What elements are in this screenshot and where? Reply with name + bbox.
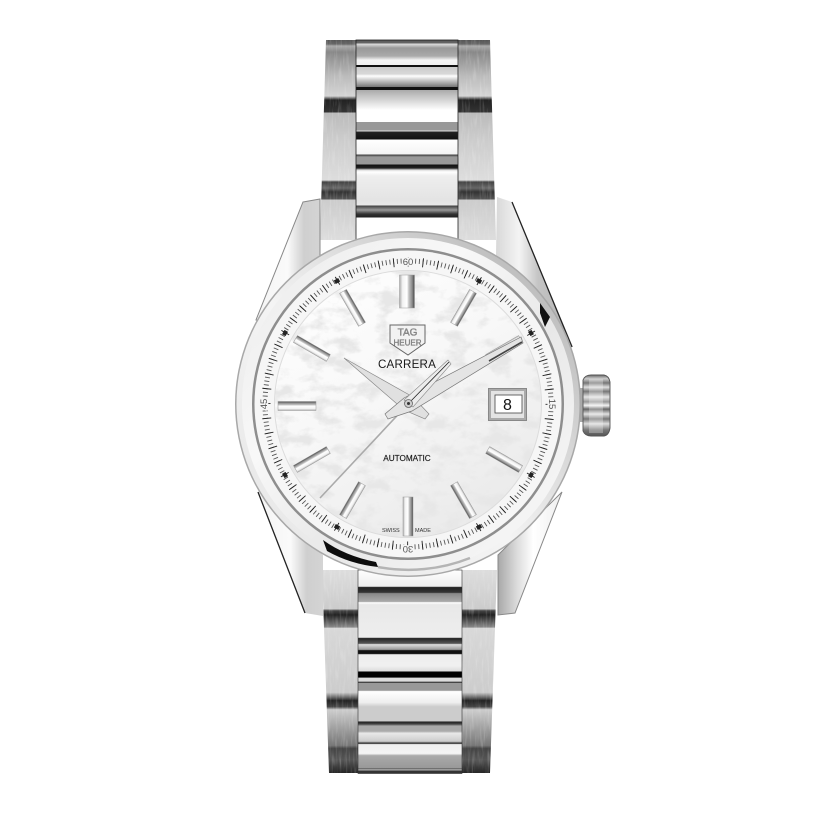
mother of pearl base: [275, 271, 541, 537]
crown body: [583, 375, 610, 436]
marker 6: [403, 497, 413, 536]
bezel outer band: [236, 232, 580, 576]
crown end highlight: [589, 379, 603, 433]
upper bracelet centre links: [356, 40, 458, 240]
seconds hand: [320, 404, 408, 498]
marker 4: [486, 447, 523, 472]
lug: lower right: [498, 492, 562, 615]
numeral 45: 45: [259, 399, 270, 409]
centre pin: [404, 400, 412, 408]
lug: upper left: [256, 199, 320, 322]
marker 11: [340, 289, 365, 326]
minute track: [265, 261, 551, 547]
crown: [576, 375, 610, 436]
date number: 8: [503, 397, 512, 414]
marker 10: [293, 336, 330, 361]
logo text HEUER: HEUER: [393, 338, 422, 348]
automatic label: AUTOMATIC: [383, 454, 431, 463]
marker 1: [451, 289, 476, 326]
brand name: CARRERA: [378, 358, 436, 371]
minute hand shadow edge: [489, 342, 522, 361]
shield outline: [390, 325, 425, 355]
hour markers: [278, 275, 523, 536]
marker 5: [451, 482, 476, 519]
marker 8: [293, 447, 330, 472]
track numerals: [259, 257, 557, 554]
seconds hand counterweight: [404, 360, 451, 407]
lug: upper right: [496, 197, 573, 347]
chapter ring: [254, 250, 562, 558]
date frame highlight: [491, 391, 524, 418]
hour hand: [344, 358, 429, 419]
brushed metal texture: [320, 40, 500, 774]
bezel inner ring: [252, 248, 564, 560]
marker 7: [340, 482, 365, 519]
marker 9: [278, 402, 316, 410]
made: MADE: [415, 528, 431, 534]
dial edge: [274, 270, 542, 538]
numeral 60: 60: [403, 257, 413, 268]
hands: [320, 337, 523, 498]
bezel: [235, 231, 581, 577]
centre pin core: [407, 402, 410, 405]
swiss: SWISS: [382, 528, 400, 534]
lug: upper right dark edge: [512, 202, 572, 347]
minor ticks: [265, 261, 551, 547]
lower bracelet: [322, 570, 497, 774]
dial: [274, 270, 542, 538]
date window: [488, 388, 526, 420]
bezel lower shadow arc: [378, 558, 470, 570]
upper bracelet side links: [320, 40, 496, 240]
lower bracelet centre links: [358, 570, 462, 774]
mother of pearl mottling: [275, 271, 541, 537]
logo: TAG Heuer shield: [390, 325, 425, 355]
major ticks: [266, 262, 550, 546]
marker 2: [486, 336, 523, 361]
bezel dark reflection lower left: [323, 540, 378, 567]
numeral 15: 15: [546, 399, 557, 409]
date aperture: [495, 395, 522, 413]
numeral 30: 30: [403, 543, 413, 554]
date frame: [488, 388, 526, 420]
lug: lower left: [258, 492, 323, 616]
lug: lower left dark edge: [258, 492, 305, 613]
minute hand: [385, 337, 523, 419]
swiss made label: [382, 528, 431, 534]
lower bracelet side links: [322, 570, 497, 773]
marker 12: [400, 275, 414, 308]
logo text TAG: TAG: [398, 328, 418, 338]
watch illustration: [235, 40, 610, 774]
five-minute squares: [282, 278, 534, 530]
bezel outer edge: [235, 231, 581, 577]
seconds hand core: [408, 362, 449, 404]
upper bracelet: [320, 40, 496, 240]
crown stem: [576, 388, 586, 422]
bezel polished face: [242, 238, 574, 570]
case lugs: [256, 197, 573, 616]
bezel dark reflection upper right: [540, 303, 550, 327]
